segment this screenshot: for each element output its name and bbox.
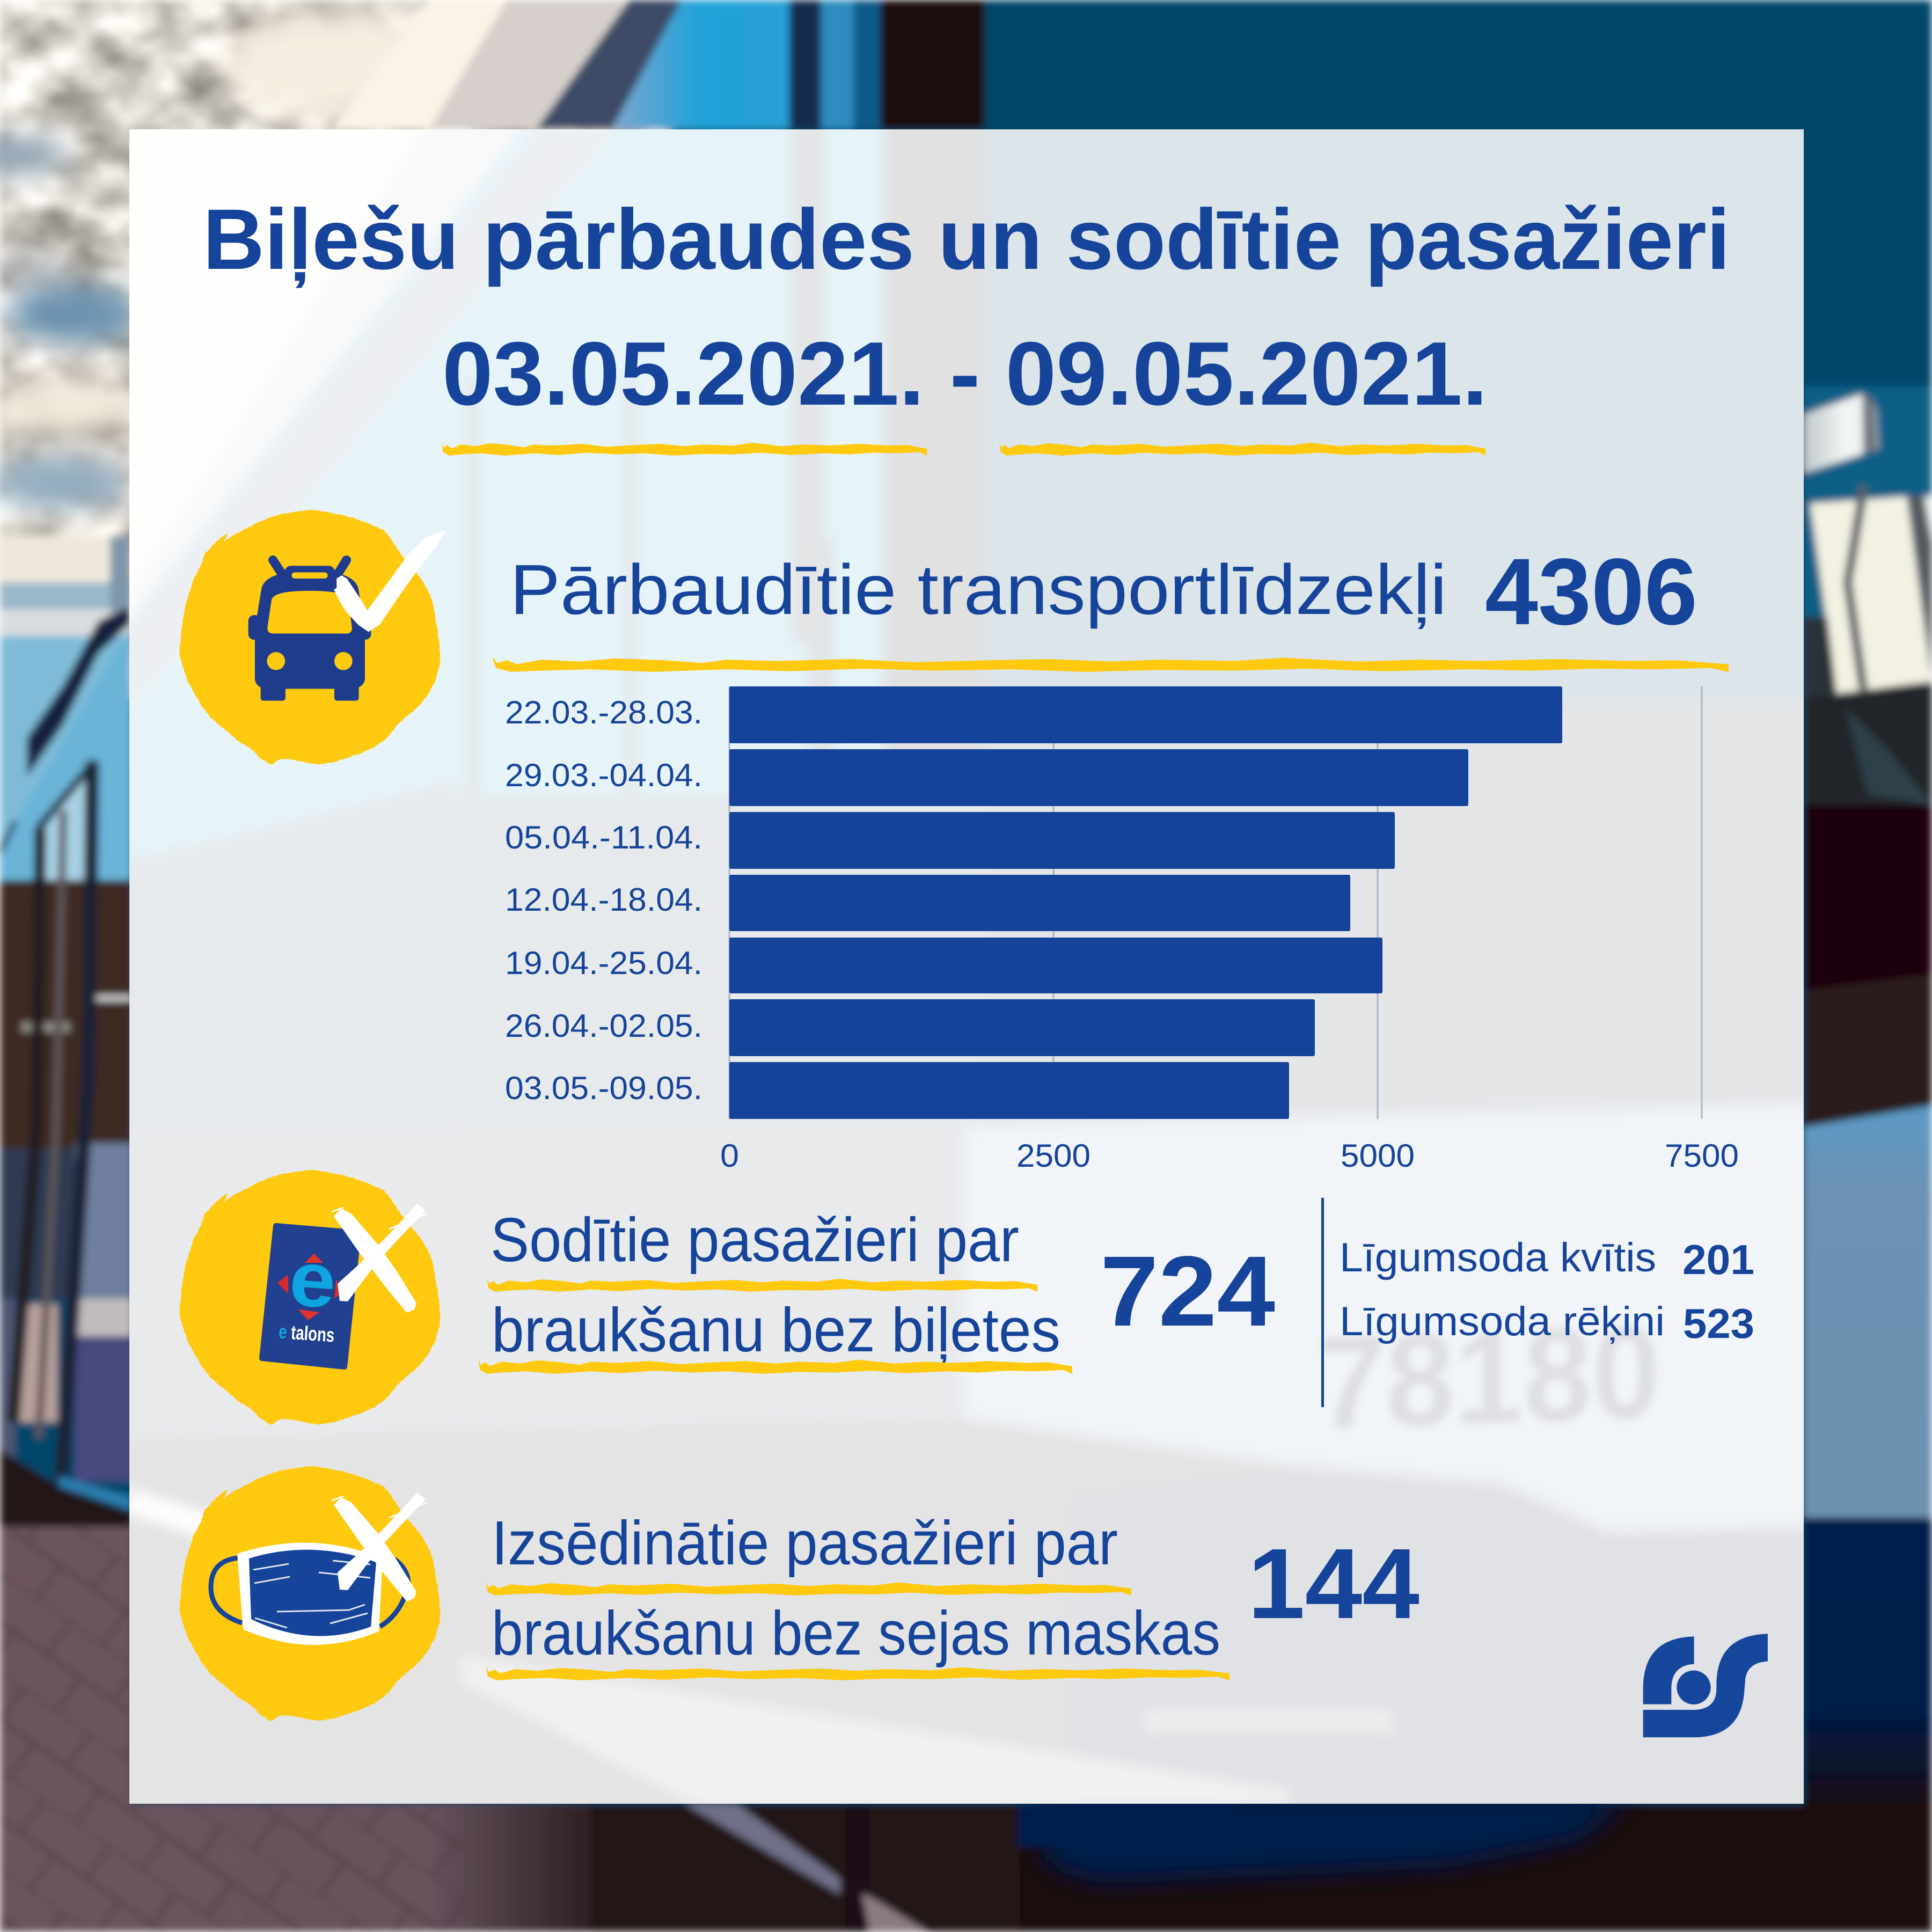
icon: e-talons card with cross: e bbox=[287, 1234, 339, 1324]
heading: removed passengers: Izsēdinātie pasažieri par bbox=[492, 1508, 1118, 1578]
roof band bbox=[333, 0, 507, 129]
value: 4306: 4306 bbox=[1485, 539, 1697, 645]
bar chart: 2500 bbox=[1016, 1138, 1091, 1174]
date range: 03.05.2021. - 09.05.2021. bbox=[442, 323, 1488, 424]
left bus side bbox=[0, 537, 131, 1546]
pavement bbox=[0, 1527, 131, 1932]
heading: fined passengers: braukšanu bez biļetes bbox=[492, 1295, 1060, 1365]
translucent panel bbox=[129, 129, 1804, 1804]
bus window strip, top bbox=[536, 0, 682, 129]
heading: inspected vehicles bbox=[510, 539, 1697, 645]
title: Biļešu pārbaudes un sodītie pasažieri bbox=[203, 191, 1730, 288]
breakdown: fines: 523 bbox=[1683, 1300, 1754, 1347]
bar chart: 19.04.-25.04. bbox=[505, 945, 702, 981]
logo: Rīgas Satiksme bbox=[1643, 1634, 1768, 1737]
bar chart: 12.04.-18.04. bbox=[505, 882, 702, 918]
bar chart: 05.04.-11.04. bbox=[505, 819, 702, 855]
bar chart: 22.03.-28.03. bbox=[505, 694, 702, 730]
breakdown: fines: Līgumsoda kvītis bbox=[1340, 1235, 1656, 1280]
bar chart: 7500 bbox=[1665, 1138, 1739, 1174]
bar chart bbox=[505, 686, 1739, 1174]
title underlines bbox=[442, 442, 1485, 456]
heading: inspected vehicles: Pārbaudītie transportlīdzekļi bbox=[510, 550, 1447, 629]
icon: e-talons card with cross: e talons bbox=[278, 1321, 335, 1346]
sky and clouds bbox=[0, 0, 671, 698]
value: 144: 144 bbox=[1248, 1528, 1419, 1640]
value: 724: 724 bbox=[1100, 1236, 1275, 1347]
underlines: fined passengers bbox=[478, 1278, 1072, 1374]
bar chart: 5000 bbox=[1341, 1138, 1415, 1174]
heading: fined passengers: Sodītie pasažieri par bbox=[491, 1205, 1019, 1275]
right window bbox=[1804, 386, 1932, 708]
breakdown: fines: 201 bbox=[1682, 1236, 1754, 1283]
underlines: removed passengers bbox=[486, 1582, 1230, 1680]
icon: face mask with cross bbox=[179, 1467, 440, 1721]
divider bbox=[1321, 1198, 1324, 1407]
heading: removed passengers bbox=[492, 1508, 1220, 1668]
icon: e-talons card with cross bbox=[179, 1170, 440, 1425]
icon: trolleybus with check mark bbox=[179, 510, 445, 765]
breakdown: fines bbox=[1340, 1235, 1754, 1347]
photo seen through panel bbox=[129, 129, 1804, 1804]
bar chart: 29.03.-04.04. bbox=[505, 757, 702, 793]
heading: removed passengers: braukšanu bez sejas maskas bbox=[492, 1598, 1220, 1668]
right dark section bbox=[1804, 682, 1932, 805]
bar chart: 03.05.-09.05. bbox=[505, 1070, 702, 1106]
underline: vehicles bbox=[492, 656, 1729, 672]
breakdown: fines: Līgumsoda rēķini bbox=[1340, 1299, 1665, 1344]
bar chart: 0 bbox=[720, 1138, 739, 1174]
bar chart: 26.04.-02.05. bbox=[505, 1008, 702, 1044]
heading: fined passengers bbox=[491, 1205, 1060, 1365]
number plate on bus front: 78180 bbox=[1317, 1298, 1660, 1457]
title bbox=[203, 191, 1730, 424]
